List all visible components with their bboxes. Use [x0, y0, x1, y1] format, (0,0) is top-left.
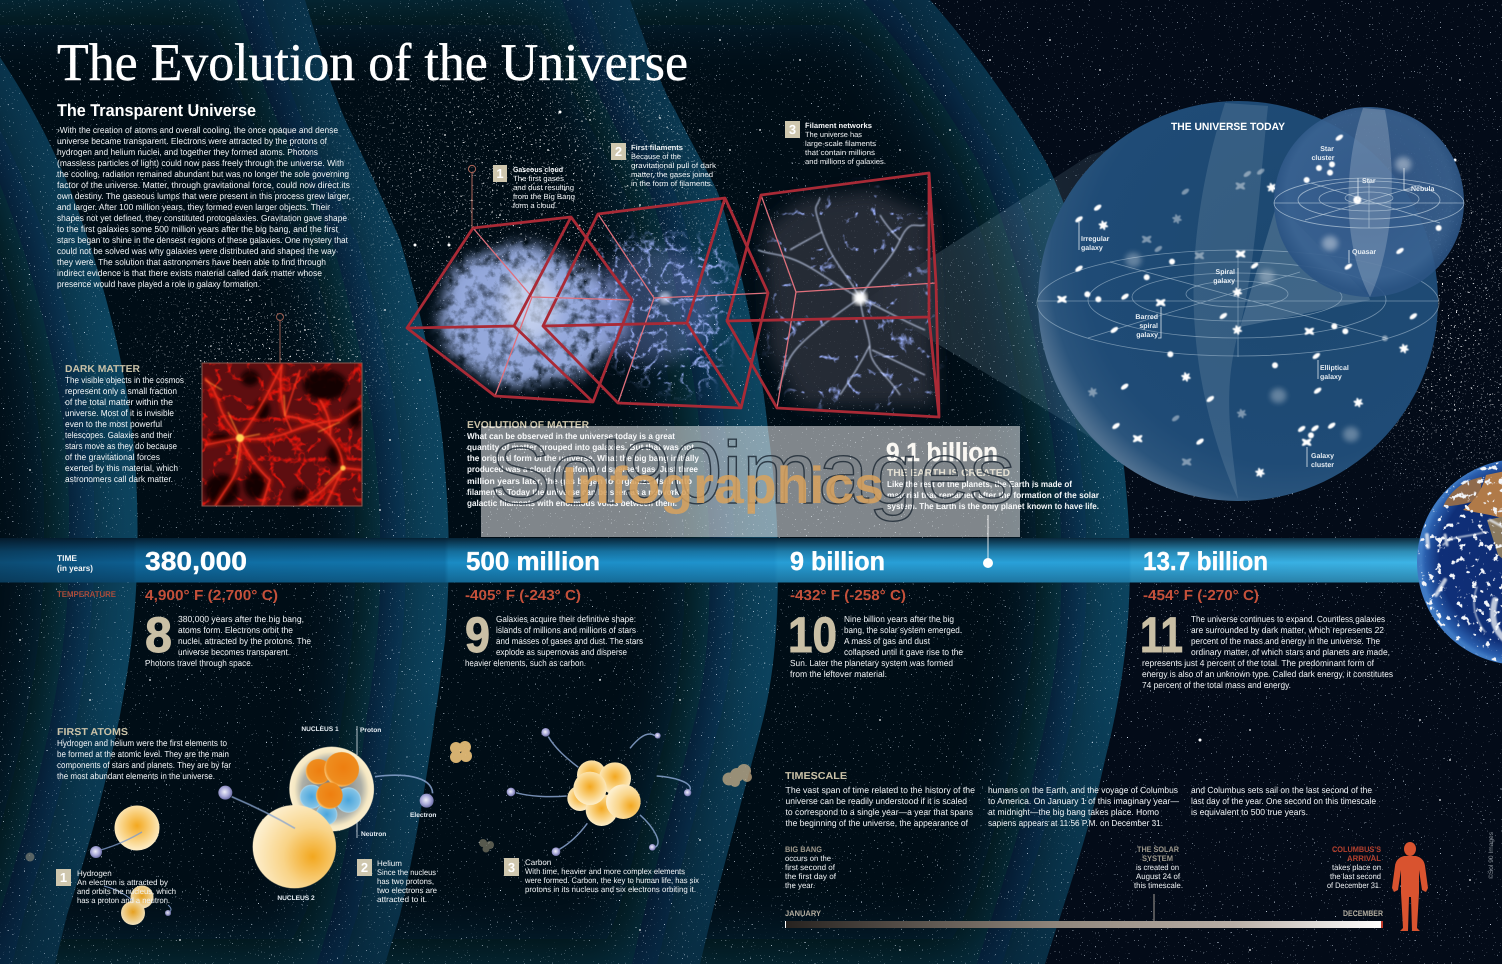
panel: first atoms text: FIRST ATOMS — [57, 727, 128, 738]
icon: human figure — [1392, 842, 1428, 931]
callout 3: filament networks: The universe has — [805, 130, 862, 139]
era 11: 13.7 billion years: The universe continues to expand. Countless galaxies — [1191, 614, 1386, 624]
timescale text columns: The vast span of time related to the history of the — [786, 785, 975, 795]
title: The Evolution of the Universe — [57, 34, 688, 92]
text: 9.1 billion, the earth is created: Like the rest of the planets, the Earth is made of — [887, 479, 1072, 489]
cube 2 wireframe — [543, 198, 768, 408]
illustration: carbon atom — [507, 728, 691, 856]
timescale text columns: humans on the Earth, and the voyage of Columbus — [988, 785, 1179, 795]
callout 3: filament networks: that contain millions — [805, 148, 875, 157]
text: evolution of matter: galactic filaments with enormous voids between them. — [467, 498, 677, 508]
text: evolution of matter: What can be observed in the universe today is a great — [467, 431, 675, 441]
era 9: 500 million years: explode as supernovas and disperse — [496, 647, 627, 657]
icon: earth — [1417, 460, 1502, 664]
callout 1: gaseous cloud — [493, 165, 575, 210]
section: the transparent universe: the cooling, radiation remained abundant but was no longer the sole governing — [57, 169, 349, 179]
callout 1: gaseous cloud: Gaseous cloud — [513, 165, 563, 174]
panel: first atoms text: Hydrogen and helium were the first elements to — [57, 738, 227, 748]
text: evolution of matter: produced was a cloud of uniformly dispersed gas. Just three — [467, 464, 698, 474]
sphere labels: Star — [1320, 146, 1334, 153]
section: the transparent universe: presence would have played a role in galaxy formation. — [57, 279, 260, 289]
era 10: 9 billion years: bang, the solar system emerged. — [844, 625, 962, 635]
section: the transparent universe: own destiny. The gaseous lumps that were present in this process grew larger, — [57, 191, 351, 201]
cube 1 wireframe — [407, 217, 632, 402]
era 11: 13.7 billion years: 74 percent of the total mass and energy. — [1142, 680, 1291, 690]
panel: dark matter: represent only a small fraction — [65, 386, 177, 396]
callout 3: carbon: 3 — [508, 860, 515, 875]
era 11: 13.7 billion years: represents just 4 percent of the total. The predominant form of — [1142, 658, 1375, 668]
era 10: 9 billion years: 9 billion — [790, 546, 885, 576]
solar system note: this timescale. — [1134, 881, 1183, 890]
text: 9.1 billion, the earth is created: THE EARTH IS CREATED — [887, 468, 1010, 479]
helium labels: Proton — [360, 727, 381, 734]
era 9: 500 million years: islands of millions and millions of stars — [496, 625, 637, 635]
solar system note: is created on — [1136, 863, 1179, 872]
helium labels: Neutron — [361, 831, 386, 838]
helium labels — [277, 726, 436, 902]
era 8: 380,000 years: 4,900° F (2,700° C) — [145, 588, 278, 604]
section: the transparent universe: they were. The solution that astronomers have been able to find through — [57, 257, 326, 267]
era 11: 13.7 billion years: energy is also of an unknown type. Called dark energy, it constitutes — [1142, 669, 1394, 679]
small sphere — [1274, 107, 1464, 297]
columbus note: of December 31. — [1327, 881, 1381, 890]
era 10: 9 billion years: Nine billion years after the big — [844, 614, 954, 624]
section: the transparent universe: universe became transparent. Electrons were attracted by the protons of — [57, 136, 328, 146]
callout 2: first filaments: in the form of filaments. — [631, 179, 713, 188]
sphere labels: galaxy — [1213, 277, 1235, 285]
callout 3: carbon — [504, 858, 699, 894]
section: the transparent universe: indirect evidence is that there exists material called dark matter whose — [57, 268, 322, 278]
callout 2: helium — [357, 859, 438, 904]
section: the transparent universe: to the first galaxies some 500 million years after the big bang, and the first — [57, 224, 339, 234]
callout 2: helium: attracted to it. — [377, 895, 427, 904]
era 11: 13.7 billion years: are surrounded by dark matter, which represents 22 — [1191, 625, 1384, 635]
callout 3: carbon: Carbon — [525, 858, 551, 867]
section: the transparent universe: stars began to shine in the densest regions of these galaxies. One mystery that — [57, 235, 349, 245]
evolution of matter: cubes and cloud — [407, 121, 939, 417]
lower extra atom — [104, 886, 171, 925]
era 10: 9 billion years: -432° F (-258° C) — [790, 588, 906, 604]
text: 9.1 billion, the earth is created: system. The Earth is the only planet known to have life. — [887, 501, 1099, 511]
small background atoms — [26, 741, 752, 862]
section: the transparent universe: hydrogen and helium nuclei, and together they formed atoms. Photons — [57, 147, 319, 157]
era 9: 500 million years: heavier elements, such as carbon. — [465, 658, 586, 668]
callout 1: gaseous cloud: form a cloud. — [513, 201, 557, 210]
illustration: helium atom — [218, 726, 436, 902]
panel: dark matter: stars move as they do because — [65, 441, 177, 451]
callout 2: helium: two electrons are — [377, 886, 438, 895]
section: the transparent universe: and larger. After 100 million years, they formed even larger objects. Their — [57, 202, 330, 212]
big sphere — [1038, 101, 1438, 501]
columbus note: takes place on — [1332, 863, 1381, 872]
timescale text columns: to America. On January 1 of this imaginary year— — [988, 796, 1179, 806]
era 8: 380,000 years: atoms form. Electrons orbit the — [178, 625, 293, 635]
callout 3: carbon: were formed. Carbon, the key to human life, has six — [524, 876, 699, 885]
timeline bar — [0, 515, 1425, 582]
era 8: 380,000 years: universe becomes transparent. — [178, 647, 290, 657]
callout 3: filament networks: Filament networks — [805, 121, 872, 130]
era 8: 380,000 years: 380,000 — [145, 546, 247, 576]
era 10: 9 billion years: Sun. Later the planetary system was formed — [790, 658, 953, 668]
timescale bar — [785, 894, 1383, 928]
callout 1: gaseous cloud: 1 — [496, 166, 504, 181]
era 8: 380,000 years: 8 — [145, 607, 172, 663]
text: evolution of matter: the original form of the universe. What the big bang initially — [467, 453, 699, 463]
panel: the universe today spheres — [1037, 101, 1464, 501]
panel: timescale — [785, 771, 1428, 931]
sphere labels: Star — [1362, 178, 1376, 185]
text: evolution of matter: million years later, the gas began to organize itself into — [467, 476, 692, 486]
sphere labels: Quasar — [1352, 249, 1376, 256]
era 9: 500 million years: -405° F (-243° C) — [465, 588, 581, 604]
timescale text columns: universe can be readily understood if it is scaled — [786, 796, 967, 806]
callout 3: filament networks — [785, 121, 886, 166]
columbus note — [1327, 845, 1382, 890]
helium labels: NUCLEUS 1 — [301, 726, 339, 733]
timescale text columns: and Columbus sets sail on the last second of the — [1191, 785, 1372, 795]
callout 2: helium: has two protons, — [377, 877, 434, 886]
leader lines — [1079, 168, 1412, 467]
timeline row labels: TEMPERATURE — [57, 589, 116, 599]
era 8: 380,000 years: 380,000 years after the big bang, — [178, 614, 304, 624]
marker: earth created — [983, 515, 993, 568]
era 9: 500 million years — [465, 546, 644, 668]
timescale bar: DECEMBER — [1343, 909, 1383, 918]
era 10: 9 billion years — [788, 546, 963, 679]
callout 3: carbon: With time, heavier and more complex elements — [525, 867, 685, 876]
sphere labels: spiral — [1139, 322, 1158, 330]
sphere labels: Barred — [1135, 313, 1158, 321]
panel: dark matter: exerted by this material, which — [65, 463, 178, 473]
callout 2: first filaments — [611, 143, 716, 188]
columbus note: the last second — [1330, 872, 1381, 881]
text: evolution of matter: quantity of matter grouped into galaxies. But that was not — [467, 442, 694, 452]
columbus note: COLUMBUS'S — [1332, 845, 1382, 854]
watermark: Sol90images — [490, 423, 1015, 522]
era 11: 13.7 billion years — [1140, 546, 1394, 690]
timescale text columns: the beginning of the universe, the appearance of — [786, 818, 969, 828]
text: evolution of matter: EVOLUTION OF MATTER — [467, 420, 590, 431]
callout 1: gaseous cloud: and dust resulting — [513, 183, 574, 192]
callout 1: hydrogen: Hydrogen — [77, 869, 112, 878]
era 10: 9 billion years: 10 — [788, 607, 837, 663]
callout 1: gaseous cloud: The first gases — [513, 174, 564, 183]
era 9: 500 million years: Galaxies acquire their definitive shape: — [496, 614, 636, 624]
text: evolution of matter: filaments. Today the universe can be seen as a network of — [467, 487, 689, 497]
callout 2: helium: Helium — [377, 859, 402, 868]
callout 1: gaseous cloud: from the Big Bang — [513, 192, 575, 201]
callout 2: first filaments: Because of the — [631, 152, 681, 161]
panel: first atoms text: the most abundant elements in the universe. — [57, 771, 215, 781]
galaxies in big sphere — [1056, 167, 1418, 478]
timescale text columns: sapiens appears at 11:56 P.M. on December 31. — [988, 818, 1163, 828]
panel: dark matter — [65, 314, 362, 506]
connector from gaseous cloud — [468, 165, 476, 228]
big bang note: BIG BANG — [785, 845, 822, 854]
sphere labels: galaxy — [1081, 244, 1103, 252]
era 8: 380,000 years: nuclei, attracted by the protons. The — [178, 636, 311, 646]
callout 1: hydrogen — [56, 869, 176, 905]
big bang note: the first day of — [785, 872, 837, 881]
callout 3: filament networks: 3 — [789, 122, 796, 137]
section: the transparent universe: factor of the universe. Matter, through gravitational force, could now direct its — [57, 180, 351, 190]
section: the transparent universe: ›With the creation of atoms and overall cooling, the once opaque and dense — [57, 125, 338, 135]
section: the transparent universe: shapes not yet defined, they constituted protogalaxies. Gravitation gave shape — [57, 213, 347, 223]
era 8: 380,000 years: Photons travel through space. — [145, 658, 253, 668]
text: 9.1 billion, the earth is created: 9.1 billion — [886, 437, 998, 467]
era 8: 380,000 years — [145, 546, 311, 668]
section: the transparent universe: could not be solved was why galaxies were distributed and shaped the way — [57, 246, 337, 256]
callout 2: first filaments: First filaments — [631, 143, 683, 152]
sphere labels: galaxy — [1136, 331, 1158, 339]
text: 9.1 billion, the earth is created — [886, 437, 1100, 511]
sphere labels — [1081, 121, 1434, 469]
callout 1: hydrogen: 1 — [60, 870, 67, 885]
cone of light linking filament cube to sphere — [865, 130, 1170, 450]
sphere labels: galaxy — [1320, 373, 1342, 381]
panel: first atoms text: components of stars and planets. They are by far — [57, 760, 231, 770]
cube 3 wireframe — [727, 173, 939, 417]
era 11: 13.7 billion years: percent of the mass and energy in the universe. The — [1191, 636, 1380, 646]
copyright note: ©Sol 90 Images — [1488, 831, 1495, 879]
sphere labels: Spiral — [1216, 268, 1235, 276]
section: the transparent universe: (massless particles of light) could now pass freely through the universe. With — [57, 158, 344, 168]
timescale bar: JANUARY — [785, 909, 822, 918]
text: 9.1 billion, the earth is created: material that remained after the formation of the solar — [887, 490, 1100, 500]
objects in small sphere — [1304, 133, 1442, 271]
solar system note: August 24 of — [1136, 872, 1181, 881]
helium labels: Electron — [410, 812, 436, 819]
callout 2: helium: Since the nucleus — [377, 868, 436, 877]
era 11: 13.7 billion years: ordinary matter, of which stars and planets are made, — [1191, 647, 1390, 657]
sphere labels: Elliptical — [1320, 364, 1349, 372]
section: the transparent universe — [57, 101, 351, 289]
solar system note — [1134, 845, 1183, 890]
callout 3: filament networks: large-scale filaments — [805, 139, 876, 148]
callout 3: carbon: protons in its nucleus and six electrons orbiting it. — [525, 885, 696, 894]
timescale text columns: is equivalent to 500 true years. — [1191, 807, 1308, 817]
callout 1: hydrogen: and orbits the nucleus, which — [77, 887, 176, 896]
illustration: hydrogen atom — [90, 806, 160, 858]
era 10: 9 billion years: A mass of gas and dust — [844, 636, 931, 646]
callout 1: hydrogen: An electron is attracted by — [77, 878, 168, 887]
panel: dark matter: telescopes. Galaxies and their — [65, 430, 172, 440]
timescale text columns: last day of the year. One second on this timescale — [1191, 796, 1376, 806]
timeline row labels: TIME — [57, 553, 77, 563]
helium labels: NUCLEUS 2 — [277, 895, 315, 902]
timescale text columns: to correspond to a single year—a year that spans — [786, 807, 974, 817]
panel: dark matter: of the total matter within the — [65, 397, 173, 407]
solar system note: SYSTEM — [1142, 854, 1173, 863]
era 9: 500 million years: 500 million — [466, 546, 600, 576]
panel: dark matter: The visible objects in the cosmos — [65, 375, 185, 385]
panel: dark matter: universe. Most of it is invisible — [65, 408, 174, 418]
sphere labels: cluster — [1312, 154, 1335, 162]
big bang note: the year. — [785, 881, 815, 890]
sphere labels: THE UNIVERSE TODAY — [1171, 121, 1285, 133]
timescale text columns: at midnight—the big bang takes place. Homo — [988, 807, 1159, 817]
callout 2: first filaments: gravitational pull of dark — [631, 161, 716, 170]
callout 2: first filaments: matter, the gases joined — [631, 170, 713, 179]
columbus note: ARRIVAL — [1347, 854, 1381, 863]
dark matter image — [202, 363, 362, 506]
solar system note: THE SOLAR — [1137, 845, 1179, 854]
era 11: 13.7 billion years: 11 — [1140, 607, 1183, 663]
panel: dark matter: astronomers call dark matter. — [65, 474, 173, 484]
sphere labels: Galaxy — [1311, 452, 1334, 460]
big bang note: first second of — [785, 863, 836, 872]
era 10: 9 billion years: collapsed until it gave rise to the — [844, 647, 963, 657]
big bang note — [785, 845, 837, 890]
callout 3: filament networks: and millions of galaxies. — [805, 157, 886, 166]
panel: first atoms text: be formed at the atomic level. They are the main — [57, 749, 229, 759]
text: evolution of matter — [467, 420, 699, 508]
era 10: 9 billion years: from the leftover material. — [790, 669, 887, 679]
sphere labels: cluster — [1311, 461, 1334, 469]
section: the transparent universe: The Transparent Universe — [57, 101, 256, 120]
panel: dark matter: of the gravitational forces — [65, 452, 161, 462]
callout 2: first filaments: 2 — [615, 144, 622, 159]
timescale text columns — [786, 785, 1376, 828]
callout 1: hydrogen: has a proton and a neutron. — [77, 896, 170, 905]
timeline row labels: (in years) — [57, 563, 93, 573]
panel: dark matter: even to the most powerful — [65, 419, 162, 429]
panel: first atoms text — [57, 727, 231, 781]
watermark: Infographics — [562, 457, 884, 515]
sphere labels: Irregular — [1081, 235, 1110, 243]
matter textures — [440, 190, 935, 405]
big bang note: occurs on the — [785, 854, 832, 863]
era 9: 500 million years: 9 — [465, 607, 490, 663]
callout 2: helium: 2 — [361, 860, 368, 875]
era 11: 13.7 billion years: 13.7 billion — [1143, 546, 1268, 576]
timeline row labels — [57, 553, 116, 599]
sphere labels: Nebula — [1411, 185, 1434, 193]
panel: timescale: TIMESCALE — [785, 771, 847, 782]
era 9: 500 million years: and masses of gases and dust. The stars — [496, 636, 644, 646]
era 11: 13.7 billion years: -454° F (-270° C) — [1143, 588, 1259, 604]
panel: dark matter: DARK MATTER — [65, 364, 141, 375]
big sphere disk and rings — [1037, 250, 1439, 357]
small sphere disk and rings — [1274, 178, 1464, 228]
dark matter connector — [276, 314, 284, 363]
